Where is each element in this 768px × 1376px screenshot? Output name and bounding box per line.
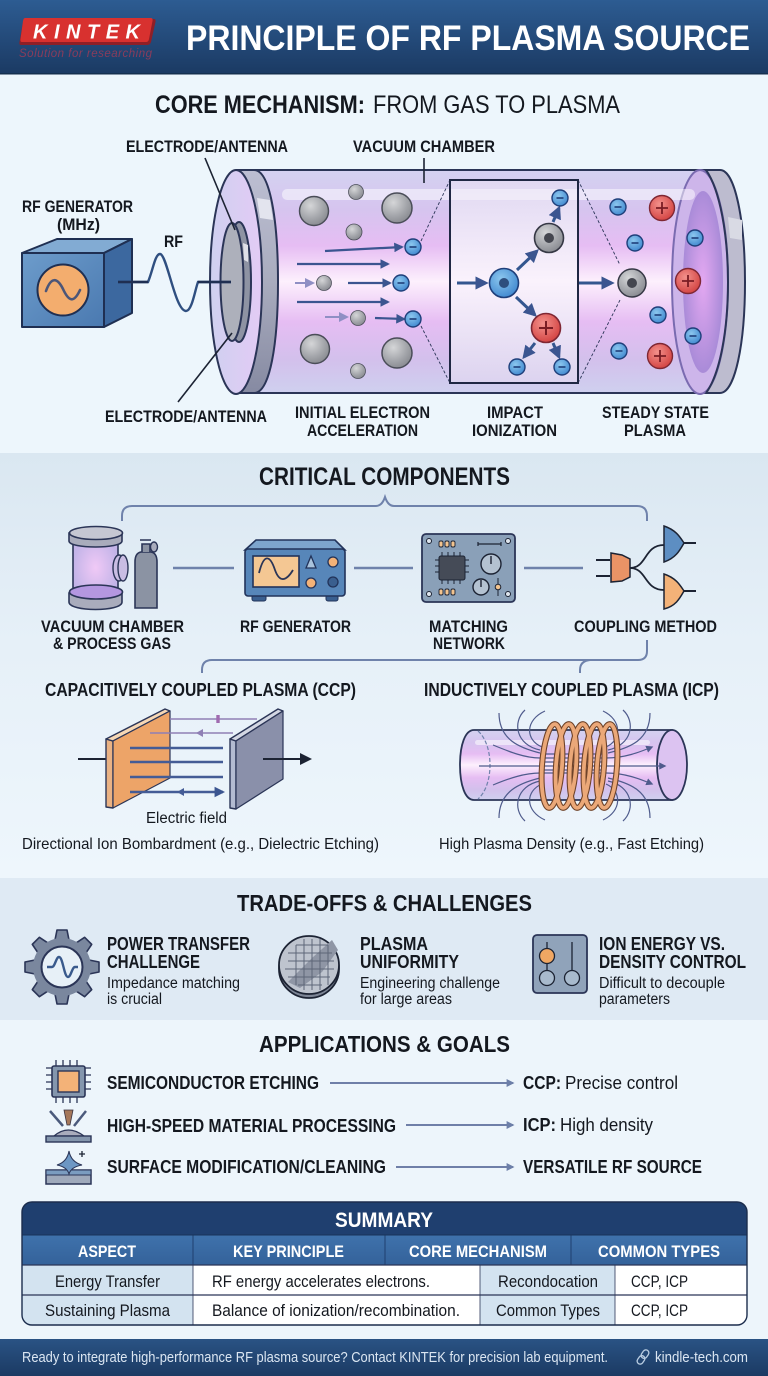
panel: critical components bbox=[0, 453, 768, 878]
table header row bbox=[22, 1235, 747, 1265]
footer text: Ready to integrate high-performance RF plasma source? Contact KINTEK for precision lab equipment. bbox=[22, 1349, 608, 1366]
label: impact ionization bbox=[472, 404, 557, 440]
label: impact ionization: IONIZATION bbox=[472, 422, 557, 440]
panel: trade-offs bbox=[0, 878, 768, 1020]
heading: ICP: INDUCTIVELY COUPLED PLASMA (ICP) bbox=[424, 680, 719, 700]
icon: wafer bbox=[279, 936, 339, 998]
label: RF generator: RF GENERATOR bbox=[22, 198, 133, 216]
text: high-speed: HIGH-SPEED MATERIAL PROCESSING bbox=[107, 1116, 396, 1136]
atom: ion bbox=[532, 314, 560, 342]
steady state particles bbox=[579, 196, 703, 368]
heading: applications: APPLICATIONS & GOALS bbox=[259, 1031, 510, 1057]
logo: KINTEK bbox=[19, 18, 156, 60]
text: power transfer: CHALLENGE bbox=[107, 952, 200, 972]
text: semiconductor etching: SEMICONDUCTOR ETCHING bbox=[107, 1073, 319, 1093]
label: coupling method: COUPLING METHOD bbox=[574, 618, 717, 636]
impact ionization inset bbox=[450, 180, 578, 383]
arrow bbox=[396, 1166, 513, 1168]
icon: surface cleaning bbox=[46, 1151, 91, 1184]
diagram: CCP plates bbox=[78, 709, 312, 809]
RF wave and wire bbox=[118, 254, 231, 311]
arrows bbox=[457, 208, 559, 357]
logo: KINTEK: Solution for researching bbox=[19, 48, 153, 60]
highlight bar bbox=[282, 189, 695, 200]
text: power transfer bbox=[107, 934, 250, 1008]
atom: neutral bbox=[534, 224, 564, 252]
icon: gear bbox=[25, 930, 99, 1004]
row: energy transfer: Recondocation bbox=[498, 1273, 598, 1291]
row: sustaining plasma: Common Types bbox=[496, 1302, 600, 1320]
text: CCP goal: CCP: bbox=[523, 1073, 561, 1093]
label: vacuum chamber and process gas bbox=[41, 618, 184, 653]
table header row: COMMON TYPES bbox=[598, 1242, 720, 1261]
text: power transfer: is crucial bbox=[107, 991, 162, 1008]
footer bbox=[0, 1339, 768, 1376]
icon: control panel bbox=[533, 935, 587, 993]
footer url: kindle-tech.com bbox=[655, 1349, 748, 1366]
text: ion energy: Difficult to decouple bbox=[599, 975, 725, 992]
row: energy transfer bbox=[55, 1273, 688, 1291]
icon: vacuum chamber and gas bbox=[69, 526, 158, 610]
label: vacuum chamber: VACUUM CHAMBER bbox=[353, 138, 495, 156]
label: initial electron acceleration bbox=[295, 404, 430, 440]
text: CCP description: Directional Ion Bombardment (e.g., Dielectric Etching) bbox=[22, 836, 379, 853]
chamber right end bbox=[672, 170, 742, 394]
label: matching network bbox=[429, 618, 508, 653]
label: RF generator bbox=[22, 198, 133, 234]
label: RF: RF bbox=[164, 233, 183, 251]
gas atoms bbox=[300, 184, 412, 378]
text: plasma uniformity: for large areas bbox=[360, 991, 452, 1008]
panel: core mechanism bbox=[0, 75, 768, 453]
label: initial electron acceleration: ACCELERATION bbox=[307, 422, 418, 440]
table header row: CORE MECHANISM bbox=[409, 1242, 547, 1261]
text: ICP goal bbox=[523, 1115, 653, 1135]
text: plasma uniformity: UNIFORMITY bbox=[360, 952, 459, 972]
text: surface modification: SURFACE MODIFICATION/CLEANING bbox=[107, 1157, 386, 1177]
arrow bbox=[330, 1082, 513, 1084]
label: steady state plasma: STEADY STATE bbox=[602, 404, 709, 422]
label: electric field: Electric field bbox=[146, 810, 227, 827]
electrons bbox=[393, 239, 421, 327]
label: RF generator: RF GENERATOR bbox=[240, 618, 351, 636]
diagram: ICP coil bbox=[460, 710, 687, 821]
label: steady state plasma bbox=[602, 404, 709, 440]
row: energy transfer: RF energy accelerates electrons. bbox=[212, 1273, 430, 1291]
text: power transfer: POWER TRANSFER bbox=[107, 934, 250, 954]
heading: CCP: CAPACITIVELY COUPLED PLASMA (CCP) bbox=[45, 680, 356, 700]
label: vacuum chamber and process gas: & PROCESS GAS bbox=[53, 635, 171, 653]
icon: chip bbox=[46, 1060, 91, 1103]
arrow bbox=[406, 1124, 513, 1126]
row: sustaining plasma: CCP, ICP bbox=[631, 1302, 688, 1320]
atom: electron core bbox=[490, 268, 518, 298]
icon: torch bbox=[46, 1110, 91, 1142]
text: plasma uniformity bbox=[360, 934, 500, 1008]
table header row: KEY PRINCIPLE bbox=[233, 1242, 344, 1261]
icon: RF generator bbox=[245, 540, 345, 601]
text: ion energy bbox=[599, 934, 746, 1008]
connector lines bbox=[173, 567, 583, 569]
icon: link bbox=[636, 1349, 650, 1365]
label: electrode bottom: ELECTRODE/ANTENNA bbox=[105, 408, 267, 426]
lower bracket bbox=[202, 640, 647, 673]
electrode disc bbox=[220, 222, 251, 342]
leader lines bbox=[178, 158, 424, 402]
label: impact ionization: IMPACT bbox=[487, 404, 543, 422]
text: ion energy: ION ENERGY VS. bbox=[599, 934, 725, 954]
text: ion energy: parameters bbox=[599, 991, 670, 1008]
text: ICP goal: ICP: bbox=[523, 1115, 556, 1135]
header bar bbox=[0, 0, 768, 74]
heading: trade-offs: TRADE-OFFS & CHALLENGES bbox=[237, 890, 532, 916]
text: plasma uniformity: PLASMA bbox=[360, 934, 428, 954]
copper coil bbox=[539, 723, 620, 809]
row: sustaining plasma: Balance of ionization/recombination. bbox=[212, 1302, 460, 1320]
label: vacuum chamber and process gas: VACUUM CHAMBER bbox=[41, 618, 184, 636]
label: matching network: MATCHING bbox=[429, 618, 508, 636]
text: ICP goal: High density bbox=[560, 1115, 653, 1135]
text: CCP goal: Precise control bbox=[565, 1073, 678, 1093]
icon: coupling method bbox=[596, 526, 696, 609]
row: energy transfer: CCP, ICP bbox=[631, 1273, 688, 1291]
field lines bbox=[479, 710, 665, 821]
text: ion energy: DENSITY CONTROL bbox=[599, 952, 746, 972]
table title band bbox=[22, 1202, 747, 1235]
label: initial electron acceleration: INITIAL ELECTRON bbox=[295, 404, 430, 422]
panel: applications bbox=[0, 1020, 768, 1340]
label: electrode top: ELECTRODE/ANTENNA bbox=[126, 138, 288, 156]
table title band: SUMMARY bbox=[335, 1209, 433, 1232]
heading: core mechanism bbox=[155, 91, 620, 119]
text: versatile: VERSATILE RF SOURCE bbox=[523, 1157, 702, 1177]
table body bbox=[22, 1265, 747, 1325]
label: RF generator: (MHz) bbox=[57, 216, 100, 234]
upper bracket bbox=[122, 497, 647, 521]
acceleration arrows bbox=[295, 247, 404, 319]
text: ICP description: High Plasma Density (e.g., Fast Etching) bbox=[439, 836, 704, 853]
heading: core mechanism: CORE MECHANISM: bbox=[155, 91, 365, 119]
icon: matching network bbox=[422, 534, 515, 602]
text: power transfer: Impedance matching bbox=[107, 975, 240, 992]
table header row: ASPECT bbox=[78, 1242, 137, 1261]
icon: RF generator box bbox=[22, 239, 132, 327]
logo: KINTEK: KINTEK bbox=[33, 22, 142, 44]
label: steady state plasma: PLASMA bbox=[624, 422, 686, 440]
text: plasma uniformity: Engineering challenge bbox=[360, 975, 500, 992]
zoom dashed lines bbox=[421, 180, 620, 383]
vacuum chamber tube bbox=[210, 170, 745, 394]
heading: core mechanism: FROM GAS TO PLASMA bbox=[373, 91, 620, 119]
summary table bbox=[22, 1202, 747, 1325]
row: sustaining plasma bbox=[45, 1302, 688, 1320]
row: energy transfer: Energy Transfer bbox=[55, 1273, 160, 1291]
label: matching network: NETWORK bbox=[433, 635, 505, 653]
chamber flange bbox=[210, 170, 278, 394]
heading: critical components: CRITICAL COMPONENTS bbox=[259, 463, 510, 491]
row: sustaining plasma: Sustaining Plasma bbox=[45, 1302, 171, 1320]
